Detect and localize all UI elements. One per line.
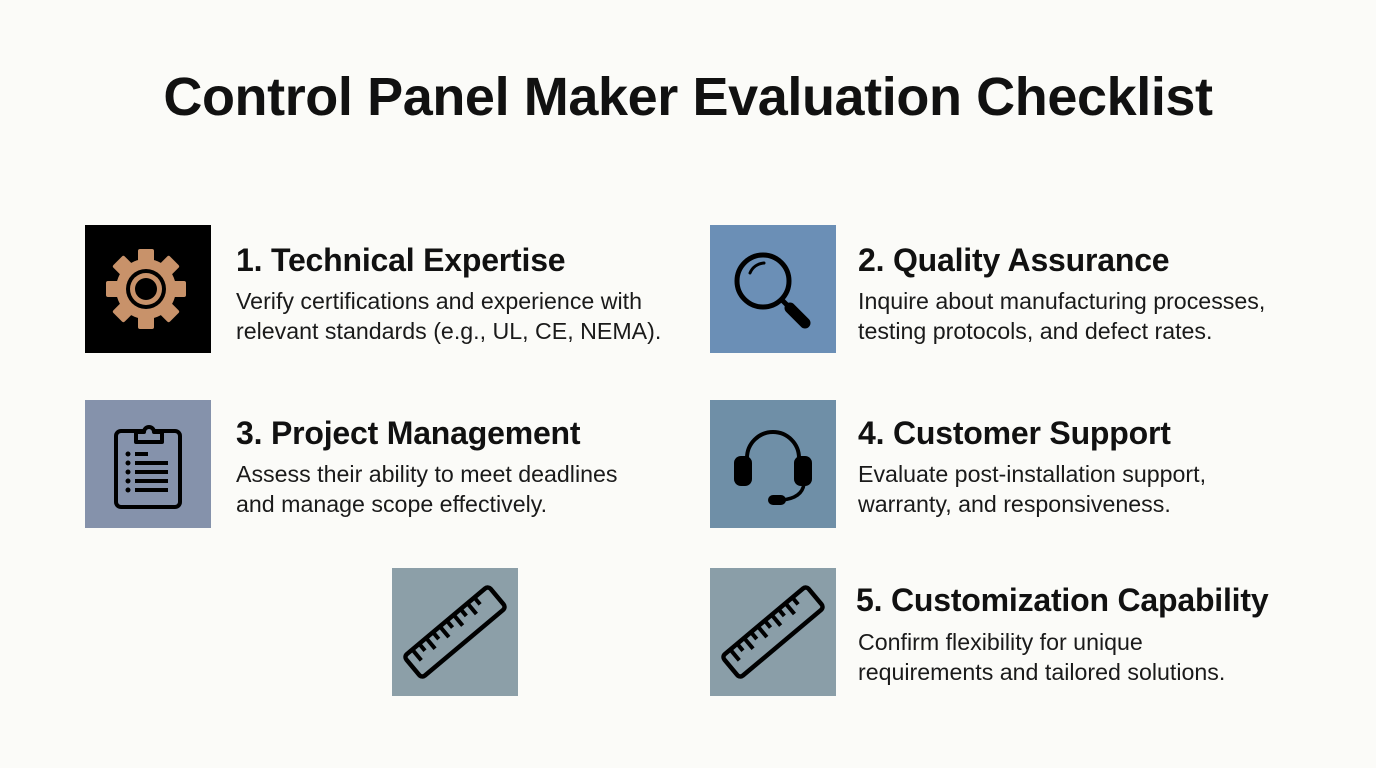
- text 4: warranty, and responsiveness.: [858, 491, 1171, 517]
- icon: magnifier: [710, 225, 836, 353]
- title: Control Panel Maker Evaluation Checklist: [163, 67, 1213, 127]
- text 4: [858, 461, 1206, 517]
- text 2: [858, 288, 1265, 344]
- icon: ruler: [710, 568, 836, 696]
- text 1: [236, 288, 661, 344]
- text 3: Assess their ability to meet deadlines: [236, 461, 618, 487]
- text 5: [858, 629, 1225, 685]
- text 4: Evaluate post-installation support,: [858, 461, 1206, 487]
- icon: headset: [710, 400, 836, 528]
- icon: gear: [85, 225, 211, 353]
- icon: ruler (extra): [392, 568, 518, 696]
- text 2: testing protocols, and defect rates.: [858, 318, 1212, 344]
- text 1: Verify certifications and experience with: [236, 288, 642, 314]
- text 2: Inquire about manufacturing processes,: [858, 288, 1265, 314]
- text 1: relevant standards (e.g., UL, CE, NEMA).: [236, 318, 661, 344]
- text 3: and manage scope effectively.: [236, 491, 547, 517]
- text 5: requirements and tailored solutions.: [858, 659, 1225, 685]
- heading 3: 3. Project Management: [236, 415, 580, 451]
- heading 1: 1. Technical Expertise: [236, 242, 565, 278]
- heading 4: 4. Customer Support: [858, 415, 1171, 451]
- icon: clipboard: [85, 400, 211, 528]
- heading 5: 5. Customization Capability: [856, 582, 1268, 618]
- heading 2: 2. Quality Assurance: [858, 242, 1169, 278]
- text 3: [236, 461, 618, 517]
- text 5: Confirm flexibility for unique: [858, 629, 1143, 655]
